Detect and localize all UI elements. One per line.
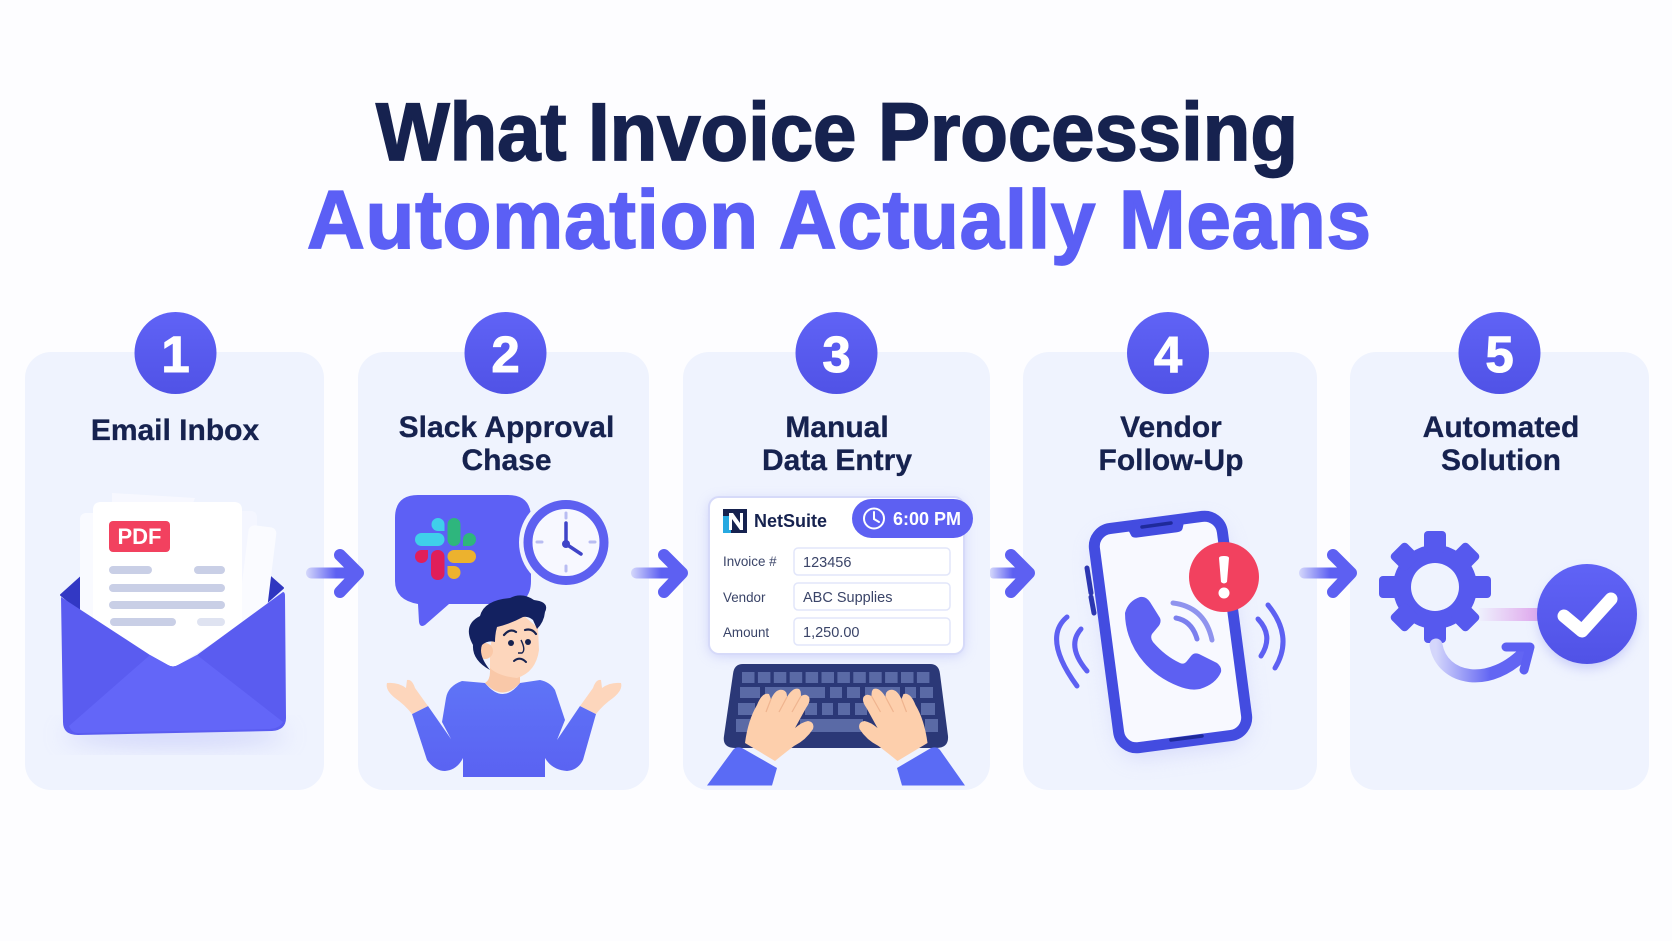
left hand [745,689,813,761]
title: Automation Actually Means [307,174,1371,266]
icon: check circle [1537,564,1637,668]
NetSuite logo: NetSuite [754,511,827,531]
icon: envelope with PDF [61,493,287,745]
heading: slack approval chase: Chase [461,444,552,477]
icon: alert badge [1189,542,1259,612]
panel: vendor follow-up [1023,312,1317,790]
step number 2: 2 [491,326,520,383]
step number 4: 4 [1154,326,1183,383]
arrow 2 to 3 [631,555,682,592]
icon: confused person shrugging [387,595,621,777]
time pill 6:00 PM: 6:00 PM [893,509,961,529]
form field: amount [723,618,950,645]
icon: curved arrow [1436,645,1530,676]
form field: invoice: Invoice # [723,554,777,569]
left sleeve [707,747,777,786]
PDF badge [109,521,170,552]
panel: email inbox [25,312,324,790]
step number 3 [796,312,878,394]
step number 4 [1127,312,1209,394]
heading: automated solution: Solution [1441,444,1561,477]
panel: manual data entry [683,312,990,790]
form field: vendor: ABC Supplies [803,590,892,606]
step number 2 [464,312,546,394]
title: What Invoice Processing [376,86,1298,177]
form field: amount: Amount [723,625,769,640]
step number 3: 3 [822,326,851,383]
form field: invoice: 123456 [803,555,851,571]
heading: vendor follow-up: Follow-Up [1099,444,1243,477]
NetSuite logo [723,509,827,533]
form field: vendor [723,583,950,610]
step number 1: 1 [161,326,190,383]
heading: manual data entry: Data Entry [762,444,912,477]
arrow 1 to 2 [306,555,358,592]
right sleeve [897,747,965,786]
icon: chat bubble with slack logo [395,495,531,626]
step number 5 [1458,312,1540,394]
arrow 3 to 4 [990,555,1029,592]
link bar [1479,608,1539,621]
heading: slack approval chase: Slack Approval [399,411,614,444]
icon: clock [519,496,613,590]
step number 1 [134,312,216,394]
left hand [387,680,428,714]
PDF badge: PDF [118,524,162,549]
right hand [859,689,928,761]
panel: slack approval chase [358,312,649,790]
handset [1125,597,1221,690]
heading: vendor follow-up: Vendor [1120,411,1222,444]
right hand [580,680,621,714]
icon: keyboard and hands [707,664,965,786]
arrow 4 to 5 [1299,555,1351,592]
form field: invoice [723,548,950,575]
icon: ringing waves [1057,605,1283,686]
time pill 6:00 PM [852,499,973,538]
heading: manual data entry: Manual [785,411,889,444]
icon: gear [1379,531,1491,643]
heading: email inbox: Email Inbox [91,414,259,447]
NetSuite form panel [709,497,973,656]
step number 5: 5 [1485,326,1514,383]
form field: amount: 1,250.00 [803,625,859,641]
icon: phone with call [1087,513,1250,758]
form field: vendor: Vendor [723,590,766,605]
panel: automated solution [1350,312,1649,790]
heading: automated solution: Automated [1423,411,1579,444]
title [307,86,1371,266]
